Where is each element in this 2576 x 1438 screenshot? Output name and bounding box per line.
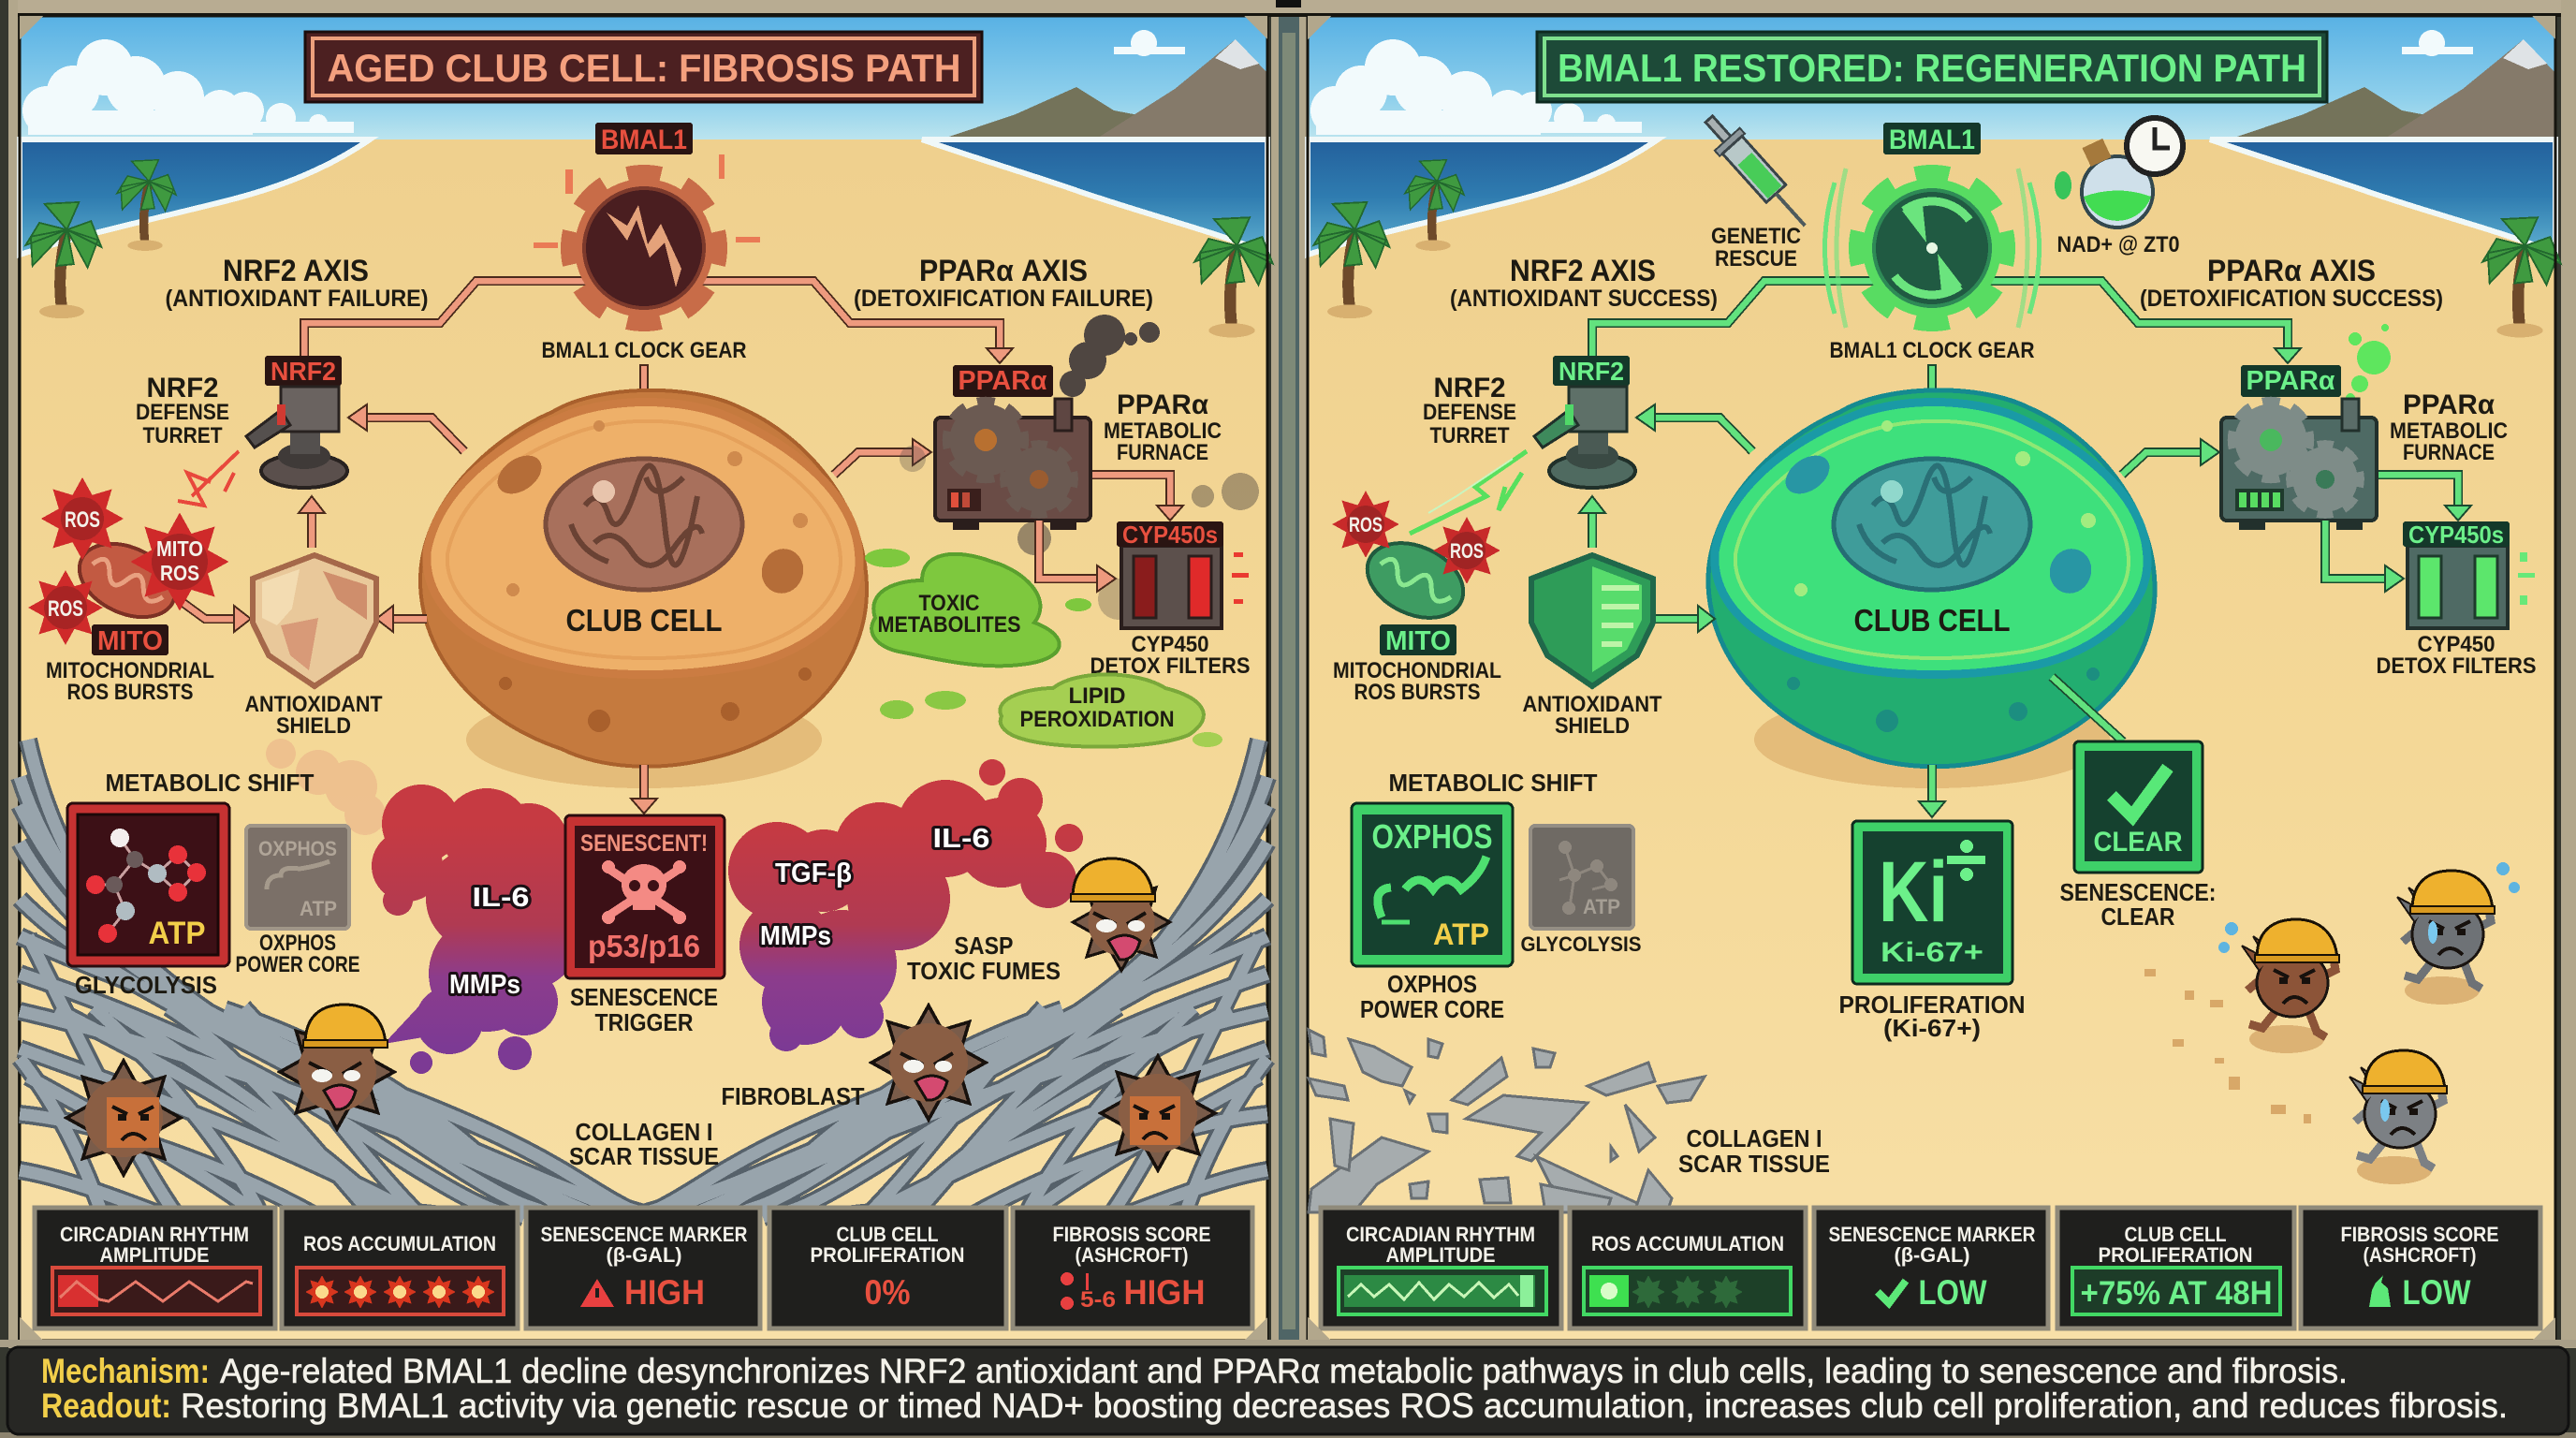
label: collagen scar tissue: COLLAGEN I [1687, 1124, 1822, 1152]
label: fibroblast: FIBROBLAST [721, 1082, 865, 1110]
fibroblast running brown [2242, 919, 2339, 1053]
label: OXPHOS power core: OXPHOS [259, 931, 336, 956]
label: collagen scar tissue [569, 1118, 719, 1170]
glycolysis active card: ATP [148, 916, 206, 951]
line: cell to clear [2052, 677, 2123, 741]
metric: club cell proliferation: PROLIFERATION [2099, 1243, 2252, 1267]
NRF2 defense turret label: TURRET [1430, 423, 1510, 448]
ROS burst top: ROS [1349, 513, 1383, 536]
metric: circadian rhythm amplitude: CIRCADIAN RHYTHM [60, 1223, 249, 1246]
label: PPARa axis: PPARα AXIS [2207, 254, 2376, 287]
Ki-67 card: Ki [1879, 844, 1948, 940]
label: NRF2 axis [165, 254, 429, 312]
metric: senescence marker [1814, 1208, 2048, 1328]
title plate [1537, 32, 2327, 102]
label: SASP toxic fumes [907, 932, 1061, 985]
label: PPARa axis: (DETOXIFICATION SUCCESS) [2140, 286, 2443, 312]
antioxidant shield cracked [253, 555, 376, 686]
furnace label: PPARα [1117, 389, 1209, 420]
label: PPARa axis: (DETOXIFICATION FAILURE) [854, 286, 1153, 312]
MITO tag: MITO [1385, 626, 1451, 656]
OXPHOS active card [1352, 803, 1513, 966]
green vapor [2346, 324, 2391, 403]
antioxidant shield label [245, 692, 383, 739]
title plate: AGED CLUB CELL: FIBROSIS PATH [328, 46, 960, 90]
antioxidant shield label [1522, 692, 1662, 739]
BMAL1 broken clock gear [534, 154, 760, 323]
cell shadow [466, 691, 822, 788]
faded smoke patch [266, 739, 386, 835]
label: senescence clear: SENESCENCE: [2059, 878, 2217, 906]
connector: BMAL1 to NRF2 [1592, 281, 1878, 358]
label: BMAL1 clock gear: BMAL1 CLOCK GEAR [541, 338, 747, 363]
connector: gear to cell [1928, 365, 1936, 395]
label: club cell: CLUB CELL [565, 603, 723, 638]
NRF2 tag: NRF2 [271, 357, 336, 386]
fibroblast: far right [1101, 1056, 1215, 1170]
furnace label: FURNACE [2403, 440, 2495, 465]
ROS burst mito [131, 513, 228, 610]
NRF2 defense turret [246, 387, 347, 488]
connector: gear to cell [640, 365, 648, 395]
metric: club cell proliferation: CLUB CELL [2125, 1223, 2226, 1246]
CYP450 label: DETOX FILTERS [2376, 653, 2537, 679]
label: genetic rescue: GENETIC [1711, 224, 1801, 249]
label: OXPHOS power core [1360, 970, 1504, 1023]
label: glycolysis: GLYCOLYSIS [1520, 932, 1642, 956]
mitochondrial label: ROS BURSTS [67, 680, 193, 705]
OXPHOS inactive card: OXPHOS [258, 837, 337, 860]
CYP450 label [1090, 632, 1251, 679]
ROS burst mito: ROS [160, 561, 199, 585]
toxic metabolites pool [865, 549, 1091, 666]
arrow: cell to turret [348, 404, 464, 451]
metric: senescence marker: LOW [1919, 1273, 1987, 1312]
title plate [305, 32, 982, 102]
senescence clear card: CLEAR [2093, 827, 2183, 858]
CYP450 label: CYP450 [2417, 632, 2496, 657]
label: proliferation [1838, 990, 2026, 1042]
dust trail [2144, 969, 2311, 1123]
ROS burst low [28, 570, 103, 645]
metric: circadian rhythm amplitude [35, 1208, 275, 1328]
label: genetic rescue [1711, 224, 1801, 271]
metric: senescence marker [526, 1208, 760, 1328]
footer caption bar [7, 1347, 2569, 1434]
OXPHOS active card: OXPHOS [1372, 817, 1492, 856]
label: PPARa axis [854, 254, 1153, 312]
cytokine labels [449, 824, 990, 1000]
ROS burst top: ROS [65, 507, 100, 533]
footer caption bar: Restoring BMAL1 activity via genetic rescue or timed NAD+ boosting decreases ROS accumulation, increases club cell proliferation, and reduces fibrosis. [181, 1387, 2508, 1425]
metric: circadian rhythm amplitude: CIRCADIAN RHYTHM [1346, 1223, 1535, 1246]
arrow: furnace to filter [2325, 521, 2404, 592]
ROS burst top [1332, 491, 1399, 558]
NRF2 defense turret label [136, 373, 229, 448]
metric: club cell proliferation: CLUB CELL [837, 1223, 938, 1246]
label: metabolic shift: METABOLIC SHIFT [1389, 769, 1598, 797]
lipid peroxidation pool: LIPID [1069, 683, 1125, 709]
furnace label: FURNACE [1117, 440, 1208, 465]
glycolysis active card [67, 803, 229, 966]
metric: club cell proliferation [2057, 1208, 2294, 1328]
panel corner trims [1308, 16, 2555, 1341]
toxic metabolites pool: TOXIC [919, 591, 979, 616]
lipid peroxidation pool: PEROXIDATION [1020, 707, 1174, 732]
arrow: cell to senescence [631, 765, 657, 814]
BMAL1 tag: BMAL1 [601, 125, 687, 155]
NRF2 defense turret label: TURRET [142, 423, 223, 448]
connector: BMAL1 to NRF2 [304, 281, 590, 358]
furnace label: PPARα [2403, 389, 2496, 420]
metric: fibrosis score: HIGH [1123, 1273, 1206, 1312]
ROS burst mito: MITO [156, 536, 203, 561]
mitochondrial label: ROS BURSTS [1354, 680, 1481, 705]
label: NRF2 axis: NRF2 AXIS [223, 254, 369, 287]
label: NAD at ZT0: NAD+ @ ZT0 [2057, 232, 2179, 257]
metric: senescence marker: (β-GAL) [1895, 1243, 1969, 1267]
NRF2 defense turret [1534, 387, 1635, 488]
furnace label [1104, 389, 1222, 465]
background beach scene [20, 16, 1273, 1343]
metric: senescence marker: SENESCENCE MARKER [541, 1223, 748, 1246]
senescence clear card [2074, 741, 2203, 873]
OXPHOS active card: ATP [1433, 917, 1489, 951]
label: metabolic shift: METABOLIC SHIFT [105, 769, 315, 797]
BMAL1 tag: BMAL1 [1889, 125, 1975, 155]
toxic metabolites pool: METABOLITES [878, 612, 1020, 638]
Ki-67 card [1852, 821, 2012, 984]
glycolysis inactive card [1530, 826, 1633, 929]
title plate: BMAL1 RESTORED: REGENERATION PATH [1558, 46, 2306, 90]
metric: fibrosis score: (ASHCROFT) [2363, 1243, 2477, 1267]
arrow: cell to furnace [834, 439, 931, 475]
metric: club cell proliferation: +75% AT 48H [2080, 1275, 2273, 1312]
senescent trigger card: p53/p16 [588, 929, 700, 963]
NAD flask [2055, 139, 2153, 227]
metric: fibrosis score: FIBROSIS SCORE [2340, 1223, 2499, 1246]
cytokine labels: IL-6 [932, 824, 990, 854]
lipid peroxidation pool [880, 674, 1222, 747]
label: senescence trigger: TRIGGER [595, 1008, 694, 1036]
arrow: cell to furnace [2122, 439, 2219, 475]
label: proliferation: PROLIFERATION [1838, 990, 2026, 1019]
label: collagen scar tissue: SCAR TISSUE [1678, 1150, 1830, 1178]
mitochondrion damaged [67, 529, 187, 632]
label: NRF2 axis [1450, 254, 1718, 312]
panel border [1308, 16, 2555, 1341]
NRF2 defense turret label: NRF2 [146, 373, 219, 404]
ROS burst right [1433, 517, 1500, 584]
antioxidant shield label: ANTIOXIDANT [245, 692, 383, 717]
fibroblast: climbing with hat [1071, 858, 1170, 971]
cytokine labels: TGF-β [775, 858, 852, 888]
background beach scene [1308, 16, 2561, 1343]
label: NRF2 axis: (ANTIOXIDANT FAILURE) [165, 286, 429, 312]
syringe: genetic rescue [1696, 108, 1818, 237]
cytokine labels: MMPs [449, 970, 520, 1000]
antioxidant shield label: SHIELD [276, 713, 351, 739]
footer caption bar: Mechanism: [41, 1352, 210, 1390]
label: collagen scar tissue [1678, 1124, 1830, 1178]
Ki-67 card: Ki-67+ [1881, 937, 1983, 968]
label: OXPHOS power core: POWER CORE [1360, 995, 1504, 1023]
metric: fibrosis score [1013, 1208, 1252, 1328]
PPARa furnace machine [2221, 399, 2377, 530]
antioxidant shield strong [1531, 555, 1653, 686]
label: proliferation: (Ki-67+) [1883, 1014, 1981, 1042]
metric: senescence marker: (β-GAL) [607, 1243, 681, 1267]
metric: club cell proliferation: 0% [865, 1273, 910, 1312]
arrow: shield to turret [299, 496, 325, 548]
metric: circadian rhythm amplitude: AMPLITUDE [99, 1243, 210, 1267]
CYP450 filter unit [2408, 546, 2535, 628]
PPARa tag: PPARα [959, 366, 1047, 396]
label: club cell: CLUB CELL [1853, 603, 2011, 638]
metric: fibrosis score [2301, 1208, 2540, 1328]
arrow: cell to turret [1636, 404, 1752, 451]
PPARa tag: PPARα [2247, 366, 2335, 396]
turret green beam [1410, 451, 1527, 534]
metric: circadian rhythm amplitude: AMPLITUDE [1385, 1243, 1496, 1267]
metric: fibrosis score: LOW [2402, 1273, 2471, 1312]
label: senescence trigger [570, 983, 718, 1036]
collagen debris [1309, 1030, 1705, 1212]
arrow: cell to proliferation [1919, 765, 1945, 817]
connector: BMAL1 to PPARa [1986, 281, 2301, 363]
glycolysis inactive card: ATP [1583, 895, 1620, 918]
NRF2 defense turret label: DEFENSE [136, 400, 229, 425]
club cell restored [1708, 390, 2155, 767]
label: PPARa axis: PPARα AXIS [919, 254, 1088, 287]
metric: fibrosis score: 5-6 [1080, 1287, 1116, 1313]
mitochondrial label [46, 658, 214, 705]
fibroblast: hat left [280, 1005, 394, 1129]
turret red sparks [178, 451, 239, 506]
metric: ROS accumulation [282, 1208, 518, 1328]
PPARa furnace machine [935, 399, 1090, 530]
furnace label [2390, 389, 2508, 465]
metric: fibrosis score: (ASHCROFT) [1075, 1243, 1189, 1267]
ROS burst low: ROS [48, 596, 83, 622]
furnace label: METABOLIC [2390, 418, 2508, 444]
NRF2 defense turret label: DEFENSE [1423, 400, 1516, 425]
mitochondrial label [1333, 658, 1501, 705]
sweat drops [2218, 862, 2520, 953]
cytokine labels: IL-6 [472, 883, 530, 913]
label: NRF2 axis: NRF2 AXIS [1510, 254, 1656, 287]
connector: BMAL1 to PPARa [698, 281, 1013, 363]
label: senescence trigger: SENESCENCE [570, 983, 718, 1011]
metric: ROS accumulation: ROS ACCUMULATION [303, 1232, 496, 1255]
footer caption bar: Readout: [41, 1387, 171, 1425]
CYP450 filter unit [1121, 546, 1249, 628]
metric: ROS accumulation: ROS ACCUMULATION [1591, 1232, 1784, 1255]
metric: club cell proliferation [769, 1208, 1006, 1328]
mitochondrial label: MITOCHONDRIAL [46, 658, 214, 683]
label: NRF2 axis: (ANTIOXIDANT SUCCESS) [1450, 286, 1718, 312]
furnace label: METABOLIC [1104, 418, 1222, 444]
NRF2 tag: NRF2 [1559, 357, 1624, 386]
CYP450s tag: CYP450s [1122, 521, 1218, 549]
cell shadow [1754, 691, 2110, 788]
arrow: shield to turret [1579, 496, 1605, 548]
cytokine labels: MMPs [760, 921, 831, 951]
label: BMAL1 clock gear: BMAL1 CLOCK GEAR [1829, 338, 2035, 363]
label: senescence clear: CLEAR [2100, 902, 2175, 931]
fibroblast: ground left [66, 1061, 181, 1175]
SASP toxic fumes cloud left [372, 785, 576, 1074]
footer caption bar: Age-related BMAL1 decline desynchronizes NRF2 antioxidant and PPARα metabolic pathways in club cells, leading to senescence and fibrosis. [220, 1352, 2348, 1390]
center divider column [1271, 0, 1307, 1348]
collagen scar tissue fibers [20, 740, 1267, 1217]
metric: senescence marker: SENESCENCE MARKER [1829, 1223, 2036, 1246]
arrow: mito to shield [181, 601, 251, 632]
senescent trigger card [565, 815, 724, 978]
arrow: cell to shield [376, 606, 427, 632]
CYP450 label: DETOX FILTERS [1090, 653, 1251, 679]
mitochondrial label: MITOCHONDRIAL [1333, 658, 1501, 683]
label: PPARa axis [2140, 254, 2443, 312]
NRF2 defense turret label: NRF2 [1434, 373, 1505, 404]
mitochondrion healthy [1355, 529, 1475, 632]
metric: club cell proliferation: PROLIFERATION [811, 1243, 964, 1267]
antioxidant shield label: ANTIOXIDANT [1522, 692, 1662, 717]
metric: circadian rhythm amplitude [1321, 1208, 1561, 1328]
senescent trigger card: SENESCENT! [580, 830, 708, 857]
metric: senescence marker: HIGH [624, 1273, 705, 1312]
label: collagen scar tissue: SCAR TISSUE [569, 1142, 719, 1170]
smoke plume [900, 315, 1259, 620]
CYP450 label: CYP450 [1131, 632, 1209, 657]
ROS burst right: ROS [1450, 539, 1484, 563]
label: OXPHOS power core: OXPHOS [1387, 970, 1477, 998]
OXPHOS inactive card: ATP [300, 897, 337, 920]
CYP450 label [2376, 632, 2537, 679]
label: genetic rescue: RESCUE [1715, 246, 1797, 271]
arrow: furnace to filter [1039, 521, 1116, 592]
fibroblast: center right [871, 1005, 986, 1120]
panel: aged club cell fibrosis path [20, 16, 1273, 1343]
BMAL1 active clock gear [1825, 169, 2039, 328]
SASP toxic fumes cloud right [728, 759, 1083, 1051]
clock [2127, 118, 2183, 174]
label: OXPHOS power core: POWER CORE [236, 952, 359, 977]
panel border [20, 16, 1267, 1341]
antioxidant shield label: SHIELD [1555, 713, 1630, 739]
arrow: furnace to CYP tag [1092, 475, 1183, 521]
panel corner trims [20, 16, 1267, 1341]
label: SASP toxic fumes: TOXIC FUMES [907, 957, 1061, 985]
arrow: shield to cell [1655, 606, 1715, 632]
arrow: furnace to CYP tag [2378, 475, 2471, 521]
ROS burst top [41, 477, 124, 560]
OXPHOS inactive card [246, 826, 349, 929]
metric: fibrosis score: FIBROSIS SCORE [1052, 1223, 1211, 1246]
fibroblast running gray bottom [2349, 1050, 2447, 1184]
metric: ROS accumulation [1570, 1208, 1806, 1328]
bottom frame strip [0, 1340, 2576, 1438]
club cell aged [420, 390, 867, 767]
MITO tag: MITO [97, 626, 163, 656]
label: SASP toxic fumes: SASP [955, 932, 1013, 960]
CYP450s tag: CYP450s [2408, 521, 2504, 549]
panel: BMAL1 restored regeneration path [1308, 16, 2561, 1343]
label: senescence clear [2059, 878, 2217, 931]
label: glycolysis: GLYCOLYSIS [75, 971, 217, 999]
fibroblast running gray top [2397, 871, 2495, 1005]
label: OXPHOS power core [236, 931, 359, 977]
NRF2 defense turret label [1423, 373, 1516, 448]
label: collagen scar tissue: COLLAGEN I [575, 1118, 713, 1146]
